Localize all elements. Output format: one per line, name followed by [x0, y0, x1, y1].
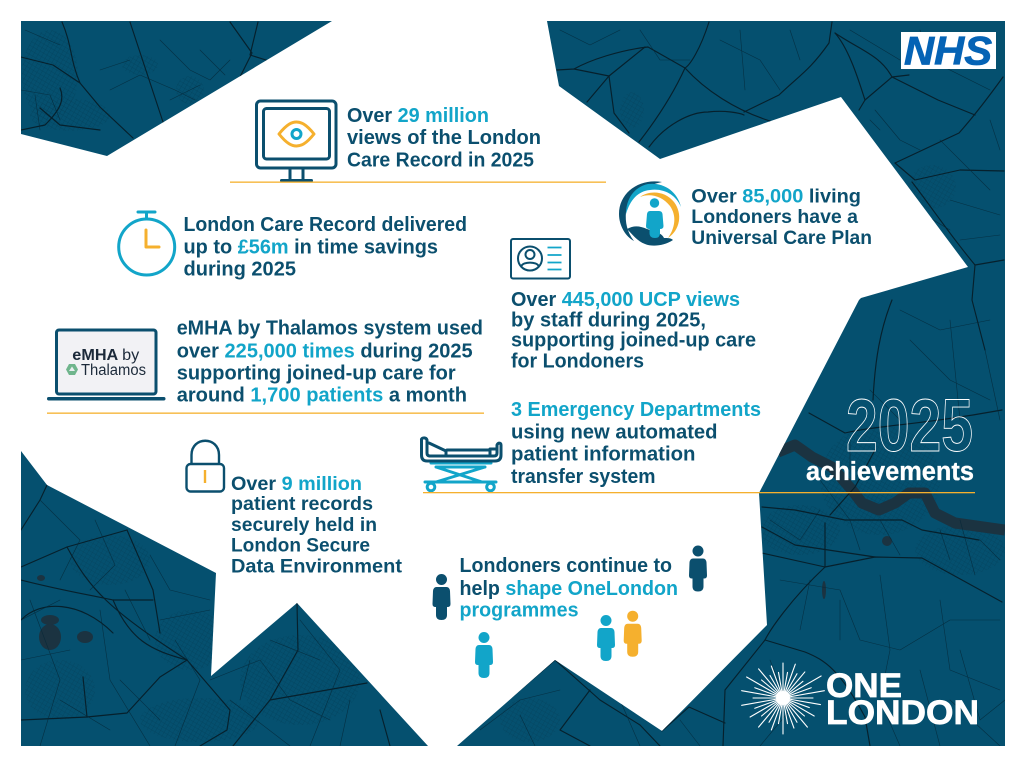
callout: Universal Care Plan: Londoners have a	[691, 206, 858, 228]
NHS logo: NHS	[904, 30, 992, 74]
callout: secure data environment	[186, 441, 403, 577]
callout: Londoners shape programmes	[432, 546, 707, 678]
callout: eMHA by Thalamos: over 225,000 times during 2025	[177, 339, 473, 362]
icon: people group	[432, 546, 707, 678]
callout: London Care Record views: views of the London	[347, 126, 541, 149]
callout: London Care Record views: Care Record in 2025	[347, 148, 534, 172]
callout: time savings: during 2025	[184, 258, 296, 280]
icon: starburst	[742, 663, 824, 734]
callout: time savings: up to £56m in time savings	[184, 236, 438, 258]
callout: secure data environment: securely held in	[231, 514, 377, 536]
callout: UCP views: for Londoners	[511, 350, 644, 373]
callout: secure data environment: Data Environment	[231, 555, 403, 577]
callout: eMHA by Thalamos: around 1,700 patients a month	[177, 383, 467, 406]
callout: Universal Care Plan	[619, 181, 872, 249]
callout: emergency departments	[421, 398, 761, 491]
callout: Londoners shape programmes: programmes	[460, 599, 578, 622]
callout: UCP views: supporting joined-up care	[511, 329, 756, 352]
callout: eMHA by Thalamos: supporting joined-up care for	[177, 361, 456, 384]
icon: laptop with eMHA logo: Thalamos	[81, 362, 146, 379]
callout: UCP views: by staff during 2025,	[511, 308, 706, 332]
divider: under emergency callout	[423, 492, 975, 493]
text: 3 Emergency Departments: 3 Emergency Departments	[511, 398, 761, 421]
callout: eMHA by Thalamos	[47, 317, 483, 406]
callout: Londoners shape programmes: help shape OneLondon	[460, 577, 678, 600]
text: 225,000 times: eMHA by Thalamos system used	[177, 317, 483, 340]
callout: Universal Care Plan: Universal Care Plan	[691, 227, 872, 249]
logo: OneLondon	[742, 663, 979, 734]
callout: London Care Record views	[256, 101, 541, 180]
text: Londoners continue: Londoners continue to	[460, 554, 672, 577]
text: 445,000 UCP views: Over 445,000 UCP views	[511, 288, 740, 311]
callout: secure data environment: patient records	[231, 493, 373, 515]
text: time savings: London Care Record delivered	[184, 213, 467, 236]
icon: laptop with eMHA logo: eMHA by	[72, 347, 140, 364]
divider: under eMHA callout	[47, 412, 484, 414]
callout: emergency departments: transfer system	[511, 465, 656, 488]
icon: monitor with eye	[256, 101, 336, 180]
text: 85,000 Londoners: Over 85,000 living	[691, 186, 861, 208]
icon: padlock	[186, 441, 224, 492]
icon: stopwatch	[119, 212, 175, 275]
callout: UCP views	[511, 239, 756, 373]
heading: 2025 achievements: 2025	[846, 384, 973, 467]
icon: laptop with eMHA logo	[47, 330, 166, 400]
text: 29 million views: Over 29 million	[347, 104, 489, 127]
icon: person in caring hand	[619, 181, 681, 246]
callout: emergency departments: patient information	[511, 443, 696, 466]
callout: secure data environment: London Secure	[231, 535, 370, 557]
icon: hospital bed	[421, 438, 501, 491]
logo: OneLondon: LONDON	[826, 694, 979, 732]
icon: ID card	[511, 239, 570, 278]
thames	[778, 445, 1005, 530]
text: 9 million records: Over 9 million	[231, 473, 362, 495]
divider: under views callout	[230, 182, 606, 183]
logo: OneLondon: ONE	[826, 667, 902, 705]
heading: 2025 achievements: achievements	[806, 458, 974, 486]
heading: 2025 achievements	[806, 384, 974, 486]
callout: time savings	[119, 212, 467, 280]
callout: emergency departments: using new automated	[511, 421, 718, 444]
